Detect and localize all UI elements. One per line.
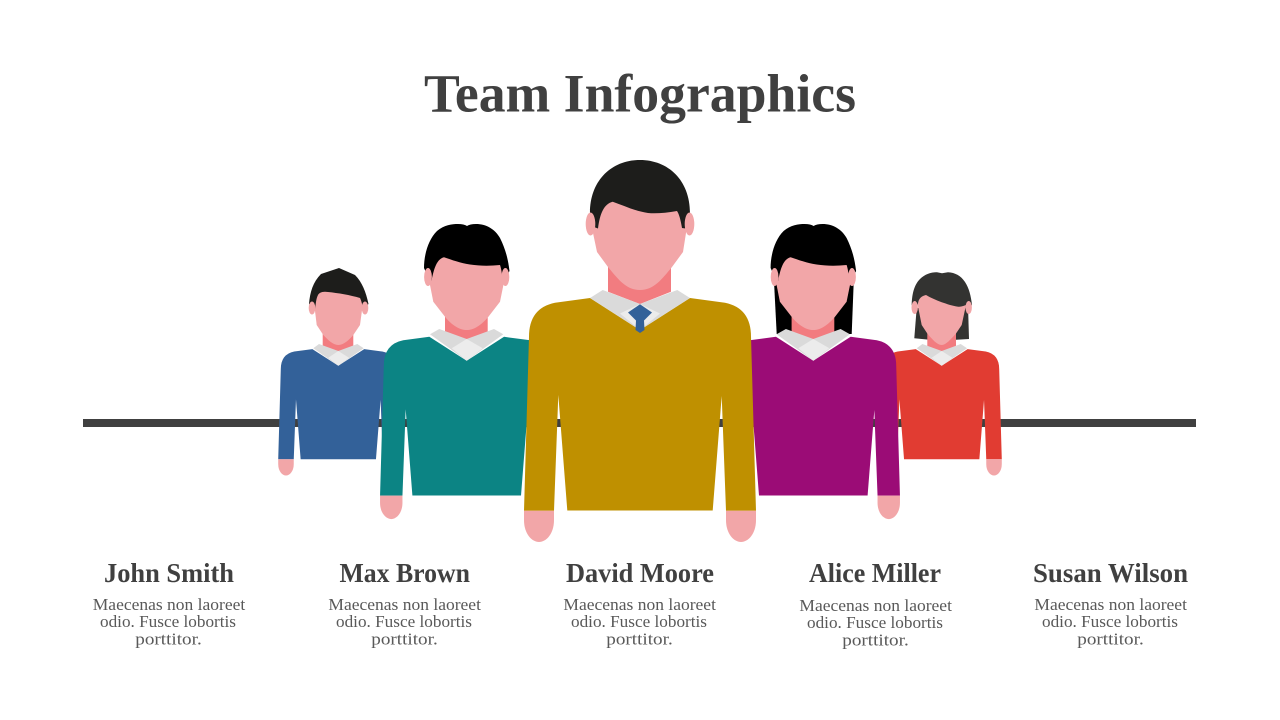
caption: David Moore	[563, 558, 716, 648]
gold figure hair	[590, 160, 690, 228]
caption: David Moore: odio. Fusce lobortis	[571, 612, 707, 631]
red collar	[917, 344, 967, 366]
caption: Alice Miller: porttitor.	[842, 630, 909, 650]
figure: David Moore gold	[524, 160, 756, 542]
caption: Alice Miller: odio. Fusce lobortis	[807, 613, 943, 632]
caption: Alice Miller	[799, 558, 952, 650]
figure: John Smith blue	[278, 268, 398, 476]
caption: Susan Wilson: porttitor.	[1077, 630, 1144, 648]
caption: Alice Miller: Maecenas non laoreet	[799, 596, 952, 615]
caption: David Moore: David Moore	[566, 558, 714, 588]
timeline bar	[83, 419, 1196, 427]
teal sweater	[380, 337, 553, 519]
caption: John Smith: Maecenas non laoreet	[93, 595, 246, 614]
caption: John Smith: porttitor.	[135, 630, 202, 648]
gold figure face	[593, 188, 686, 290]
gold figure ears	[586, 212, 694, 236]
caption: Susan Wilson: odio. Fusce lobortis	[1042, 612, 1178, 631]
red sweater	[882, 349, 1002, 476]
blue hair and head	[309, 268, 368, 355]
figure: Alice Miller purple	[727, 224, 900, 519]
caption: David Moore: Maecenas non laoreet	[563, 595, 716, 614]
red long hair and head	[912, 272, 972, 355]
caption: Alice Miller: Alice Miller	[809, 558, 941, 588]
caption: Max Brown: odio. Fusce lobortis	[336, 612, 472, 631]
gold sweater	[524, 298, 756, 511]
purple long hair and head	[771, 224, 856, 345]
purple sweater	[727, 337, 900, 519]
teal collar	[430, 329, 503, 361]
tie	[628, 304, 652, 333]
caption: Max Brown: Maecenas non laoreet	[328, 595, 481, 614]
caption: John Smith: John Smith	[104, 558, 234, 588]
purple collar	[777, 329, 850, 361]
caption: Max Brown	[328, 558, 481, 648]
collar	[590, 290, 690, 330]
hands	[524, 511, 756, 542]
caption: Max Brown: porttitor.	[371, 630, 438, 648]
figure: Susan Wilson red	[882, 272, 1002, 476]
figure: Max Brown teal	[380, 224, 553, 519]
collar inner	[620, 304, 660, 330]
caption: Susan Wilson: Susan Wilson	[1033, 558, 1188, 588]
caption: David Moore: porttitor.	[606, 630, 673, 648]
caption: Susan Wilson: Maecenas non laoreet	[1034, 595, 1187, 614]
teal hair and head	[424, 224, 510, 345]
caption: John Smith	[93, 558, 246, 648]
gold figure neck	[608, 262, 671, 304]
blue collar	[313, 344, 364, 366]
blue sweater	[278, 349, 398, 476]
title: Team Infographics	[424, 64, 856, 124]
caption: John Smith: odio. Fusce lobortis	[100, 612, 236, 631]
caption: Susan Wilson	[1033, 558, 1188, 648]
caption: Max Brown: Max Brown	[339, 558, 470, 588]
